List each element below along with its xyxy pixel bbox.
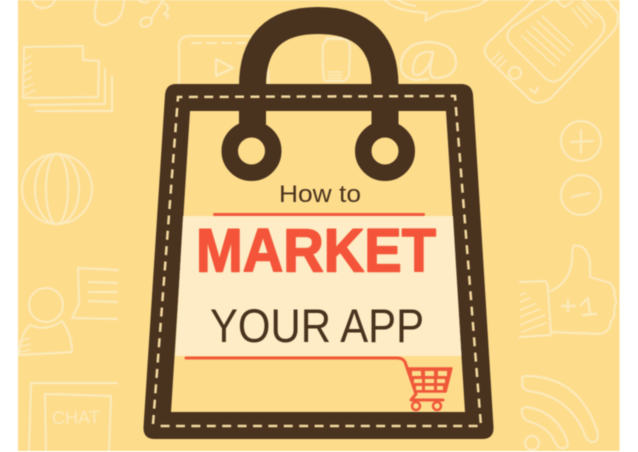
bag frame [143,84,494,439]
icon: person with speech bubble [19,268,118,355]
heading: How to: How to [279,181,361,208]
icon: chat window: CHAT [52,407,100,428]
icon: video player [179,36,269,84]
icon: speech bubble [385,0,487,21]
cart wheels [412,402,441,410]
icon: rss feed [522,376,598,450]
basket grid [412,371,447,390]
red rule under How to [213,213,425,216]
cart basket [408,368,452,392]
icon: minus circle [561,175,601,215]
icon: top-left partial circle [32,0,55,8]
icon: thumbs up [520,246,616,337]
icon: mobile phone in handle [323,38,350,81]
icon: globe [22,154,92,224]
heading: YOUR APP: YOUR APP [210,299,424,352]
heading: MARKET: MARKET [196,216,436,284]
icon: chat window [29,383,117,451]
icon: music note [139,0,168,29]
icon: smartphone [485,0,618,103]
bag handle [252,20,385,151]
icon: top blob [95,0,124,25]
icon: at sign [401,42,456,80]
icon: folder stack [23,46,112,111]
right handle ring [363,129,407,173]
left handle ring [230,129,273,173]
icon: plus circle [561,121,601,161]
cream title band [175,216,462,356]
cart handle line [186,358,443,400]
shopping cart with red rule [186,358,452,410]
bag stitching [153,96,481,426]
